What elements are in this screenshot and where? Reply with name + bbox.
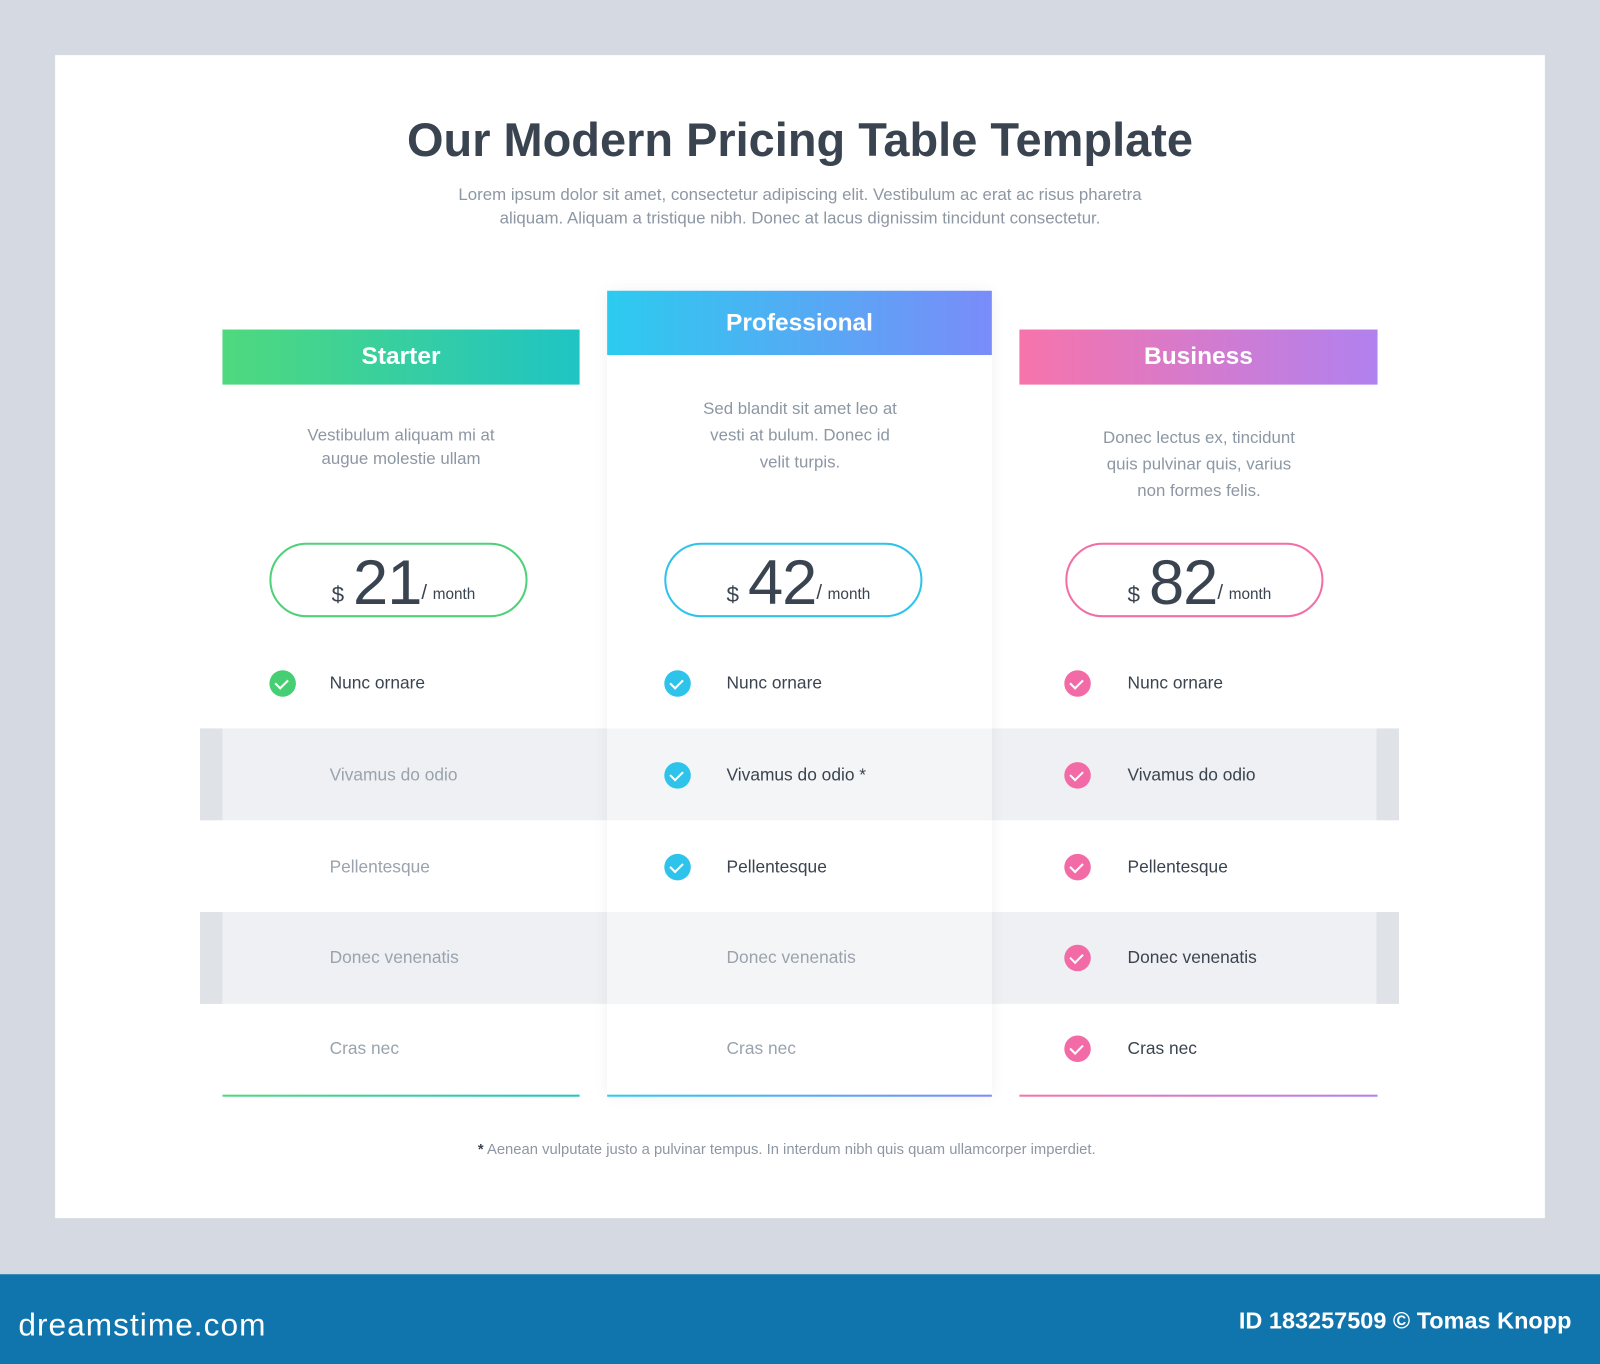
features: Starter: Nunc ornare: [330, 673, 425, 693]
desc: Starter: Vestibulum aliquam mi at: [307, 426, 495, 445]
features: Business: Nunc ornare: [1128, 673, 1223, 693]
header: Starter: [222, 330, 580, 385]
desc: Professional: Sed blandit sit amet leo at: [703, 400, 897, 418]
price: Starter: [269, 543, 528, 617]
features: Starter: [269, 670, 459, 1058]
footer credit: ID 183257509 © Tomas Knopp: [1239, 1307, 1571, 1333]
desc: Starter: [307, 426, 495, 468]
desc: Professional: vesti at bulum. Donec id: [710, 426, 890, 445]
features: Business: Pellentesque: [1128, 857, 1228, 876]
desc: Starter: augue molestie ullam: [321, 450, 481, 468]
features: Starter: Pellentesque: [330, 857, 430, 876]
features: Starter: Cras nec: [330, 1039, 399, 1058]
desc: Business: [1103, 428, 1295, 500]
header: Business: Business: [1144, 343, 1253, 370]
features: Business: Cras nec: [1128, 1039, 1197, 1058]
price: Business: / month: [1217, 582, 1271, 604]
header: Professional: [607, 291, 992, 355]
features: Business: Vivamus do odio: [1128, 765, 1255, 785]
features: Professional: Vivamus do odio *: [727, 765, 866, 785]
price: Starter: $: [332, 582, 344, 607]
subtitle: [458, 186, 1142, 228]
price: Starter: 21: [353, 548, 421, 618]
price: Starter: / month: [421, 582, 475, 604]
header: Starter: Starter: [362, 343, 440, 370]
desc: Professional: [703, 400, 897, 471]
icon: checks pink: [1064, 670, 1091, 1062]
feature bands: [200, 728, 1399, 820]
desc: Business: non formes felis.: [1137, 482, 1261, 500]
price: Business: [1065, 543, 1323, 617]
price: Professional: / month: [816, 582, 870, 604]
footer logo: dreamstime.com: [18, 1307, 266, 1343]
title: Our Modern Pricing Table Template: [407, 113, 1193, 166]
professional column shadow: [607, 291, 992, 1097]
features: Starter: Donec venenatis: [330, 948, 459, 967]
white panel: [55, 55, 1545, 1218]
price: Professional: $: [727, 582, 739, 607]
price: Business: 82: [1149, 548, 1217, 618]
features: Professional: Nunc ornare: [727, 673, 822, 693]
footnote: * Aenean vulputate justo a pulvinar tempus. In interdum nibh quis quam ullamcorper imperdiet.: [478, 1142, 1096, 1158]
features: Professional: [664, 670, 866, 1058]
features: Professional: Pellentesque: [727, 857, 827, 876]
features: Business: [1064, 670, 1257, 1062]
subtitle: aliquam. Aliquam a tristique nibh. Donec at lacus dignissim tincidunt consectetur.: [500, 209, 1100, 228]
header: Business: [1019, 330, 1378, 385]
icon: checks blue: [664, 670, 691, 880]
header: Professional: Professional: [726, 309, 873, 336]
features: Professional: Donec venenatis: [727, 948, 856, 967]
features: Business: Donec venenatis: [1128, 948, 1257, 967]
footer bar: [0, 1274, 1600, 1364]
price: Business: $: [1128, 582, 1140, 607]
desc: Professional: velit turpis.: [760, 453, 840, 471]
price: Professional: [664, 543, 922, 617]
features: Starter: Vivamus do odio: [330, 765, 458, 785]
desc: Business: quis pulvinar quis, varius: [1107, 455, 1291, 473]
subtitle: Lorem ipsum dolor sit amet, consectetur adipiscing elit. Vestibulum ac erat ac risus pharetra: [458, 186, 1142, 204]
price: Professional: 42: [748, 548, 816, 618]
icon: check green: [269, 670, 296, 697]
desc: Business: Donec lectus ex, tincidunt: [1103, 428, 1295, 447]
features: Professional: Cras nec: [727, 1039, 796, 1058]
